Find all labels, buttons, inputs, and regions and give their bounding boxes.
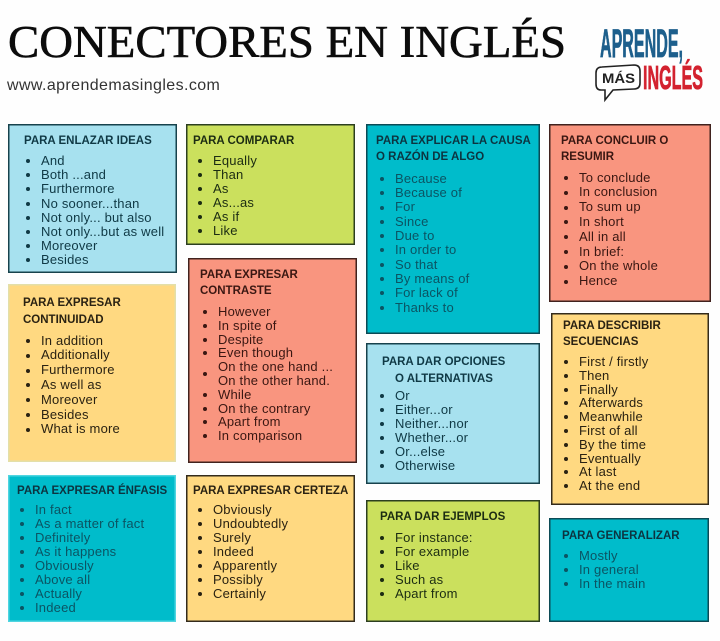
panel: para explicar la causa bbox=[366, 124, 540, 334]
heading bbox=[561, 135, 668, 163]
logo: aprende más inglés bbox=[595, 22, 703, 102]
list: Surely bbox=[213, 530, 251, 545]
list: Possibly bbox=[213, 572, 263, 587]
list: As well as bbox=[41, 377, 102, 392]
list: Undoubtedly bbox=[213, 516, 288, 531]
list: Obviously bbox=[35, 558, 94, 573]
list: Indeed bbox=[213, 544, 254, 559]
list: Either...or bbox=[395, 402, 453, 417]
list bbox=[380, 171, 470, 315]
heading bbox=[23, 296, 121, 326]
list bbox=[203, 304, 333, 443]
list: By means of bbox=[395, 271, 469, 286]
heading: PARA DAR EJEMPLOS bbox=[380, 511, 505, 523]
list: On the one hand ... bbox=[218, 359, 333, 374]
list: So that bbox=[395, 257, 438, 272]
heading: SECUENCIAS bbox=[563, 336, 638, 348]
list: On the contrary bbox=[218, 401, 311, 416]
list: In addition bbox=[41, 333, 103, 348]
list: Not only... but also bbox=[41, 210, 152, 225]
list: Apparently bbox=[213, 558, 277, 573]
list: Or bbox=[395, 388, 410, 403]
list: Definitely bbox=[35, 530, 90, 545]
heading: PARA ENLAZAR IDEAS bbox=[24, 135, 152, 147]
list bbox=[564, 354, 648, 493]
list: Like bbox=[213, 223, 238, 238]
list: Than bbox=[213, 167, 243, 182]
list: Equally bbox=[213, 153, 257, 168]
list: Additionally bbox=[41, 347, 110, 362]
list bbox=[198, 502, 288, 601]
list: Because bbox=[395, 171, 447, 186]
website url: www.aprendemasingles.com bbox=[7, 77, 220, 94]
list: Eventually bbox=[579, 451, 641, 466]
list: Indeed bbox=[35, 600, 76, 615]
heading: O RAZÓN DE ALGO bbox=[376, 151, 484, 163]
list: Actually bbox=[35, 586, 82, 601]
list: In general bbox=[579, 562, 639, 577]
panel: para describir secuencias bbox=[551, 313, 709, 505]
list: Besides bbox=[41, 407, 89, 422]
list: Even though bbox=[218, 345, 293, 360]
list: As it happens bbox=[35, 544, 116, 559]
heading: CONTRASTE bbox=[200, 285, 272, 297]
list: In order to bbox=[395, 242, 456, 257]
list: On the other hand. bbox=[218, 373, 330, 388]
list: Meanwhile bbox=[579, 409, 643, 424]
panel: para concluir o resumir bbox=[549, 124, 711, 302]
list: No sooner...than bbox=[41, 196, 140, 210]
list: For bbox=[395, 199, 415, 214]
list: To sum up bbox=[579, 199, 641, 214]
list bbox=[380, 388, 468, 473]
heading: PARA EXPLICAR LA CAUSA bbox=[376, 135, 531, 147]
heading bbox=[200, 269, 298, 297]
list: For lack of bbox=[395, 285, 458, 300]
panel: para expresar contraste bbox=[188, 258, 357, 463]
heading: O ALTERNATIVAS bbox=[395, 372, 493, 384]
list: Apart from bbox=[395, 586, 458, 601]
list bbox=[26, 333, 120, 436]
panel: para dar opciones bbox=[366, 343, 540, 484]
panel: para comparar bbox=[186, 124, 355, 245]
list bbox=[26, 153, 164, 267]
list: To conclude bbox=[579, 170, 651, 185]
list: Since bbox=[395, 214, 429, 229]
list: In the main bbox=[579, 576, 646, 591]
panel: para expresar certeza bbox=[186, 475, 355, 622]
list: Moreover bbox=[41, 392, 98, 407]
panel: para expresar énfasis bbox=[8, 475, 176, 622]
heading: PARA EXPRESAR CERTEZA bbox=[193, 485, 348, 497]
list: Then bbox=[579, 368, 609, 383]
heading: PARA CONCLUIR O bbox=[561, 135, 668, 147]
list: What is more bbox=[41, 421, 120, 436]
list: In fact bbox=[35, 502, 72, 517]
heading: PARA EXPRESAR bbox=[200, 269, 298, 281]
list: Thanks to bbox=[395, 300, 454, 315]
list: Because of bbox=[395, 185, 462, 200]
list: Certainly bbox=[213, 586, 266, 601]
list: As bbox=[213, 181, 229, 196]
list: In brief: bbox=[579, 244, 624, 259]
list: Afterwards bbox=[579, 395, 643, 410]
list: Obviously bbox=[213, 502, 272, 517]
panel: para enlazar ideas bbox=[8, 124, 177, 273]
list: Such as bbox=[395, 572, 443, 587]
list: For example bbox=[395, 544, 469, 559]
heading: CONTINUIDAD bbox=[23, 314, 104, 326]
list: As...as bbox=[213, 195, 254, 210]
list: Above all bbox=[35, 572, 90, 587]
list: Hence bbox=[579, 273, 618, 288]
list: As if bbox=[213, 209, 239, 224]
logo: aprende más inglés: MÁS bbox=[602, 70, 635, 86]
list bbox=[198, 153, 257, 238]
list: In short bbox=[579, 214, 624, 229]
list: Mostly bbox=[579, 548, 618, 563]
heading: PARA COMPARAR bbox=[193, 135, 294, 147]
list: And bbox=[41, 153, 65, 168]
list: In comparison bbox=[218, 428, 302, 443]
heading: PARA EXPRESAR ÉNFASIS bbox=[17, 485, 167, 497]
list: At the end bbox=[579, 478, 640, 493]
list: Like bbox=[395, 558, 420, 573]
list bbox=[380, 530, 473, 601]
heading bbox=[382, 356, 505, 384]
list: Both ...and bbox=[41, 167, 106, 182]
list: At last bbox=[579, 464, 617, 479]
list bbox=[564, 548, 646, 591]
list: However bbox=[218, 304, 271, 319]
list: In spite of bbox=[218, 318, 277, 333]
list bbox=[564, 170, 658, 288]
list: Moreover bbox=[41, 238, 98, 253]
list: For instance: bbox=[395, 530, 473, 545]
list: Whether...or bbox=[395, 430, 468, 445]
heading bbox=[563, 320, 661, 348]
list: By the time bbox=[579, 437, 646, 452]
list: Furthermore bbox=[41, 362, 115, 377]
heading bbox=[376, 135, 531, 163]
heading: PARA EXPRESAR bbox=[23, 296, 121, 308]
list: All in all bbox=[579, 229, 626, 244]
list: Furthermore bbox=[41, 181, 115, 196]
list: As a matter of fact bbox=[35, 516, 144, 531]
list: Finally bbox=[579, 382, 618, 397]
panel: para expresar continuidad bbox=[8, 284, 176, 462]
list: Otherwise bbox=[395, 458, 455, 473]
list: Apart from bbox=[218, 414, 281, 429]
list: First of all bbox=[579, 423, 638, 438]
heading: PARA GENERALIZAR bbox=[562, 530, 680, 542]
list: On the whole bbox=[579, 258, 658, 273]
panel: para dar ejemplos bbox=[366, 500, 540, 622]
list: While bbox=[218, 387, 252, 402]
list: Neither...nor bbox=[395, 416, 468, 431]
panel: para generalizar bbox=[549, 518, 709, 622]
list: Due to bbox=[395, 228, 435, 243]
heading: PARA DAR OPCIONES bbox=[382, 356, 505, 368]
list: Or...else bbox=[395, 444, 445, 459]
heading: RESUMIR bbox=[561, 151, 614, 163]
list: Besides bbox=[41, 252, 89, 267]
list: In conclusion bbox=[579, 184, 657, 199]
list bbox=[20, 502, 144, 615]
list: First / firstly bbox=[579, 354, 648, 369]
list: Despite bbox=[218, 332, 263, 347]
list: Not only...but as well bbox=[41, 224, 164, 239]
heading: PARA DESCRIBIR bbox=[563, 320, 661, 332]
